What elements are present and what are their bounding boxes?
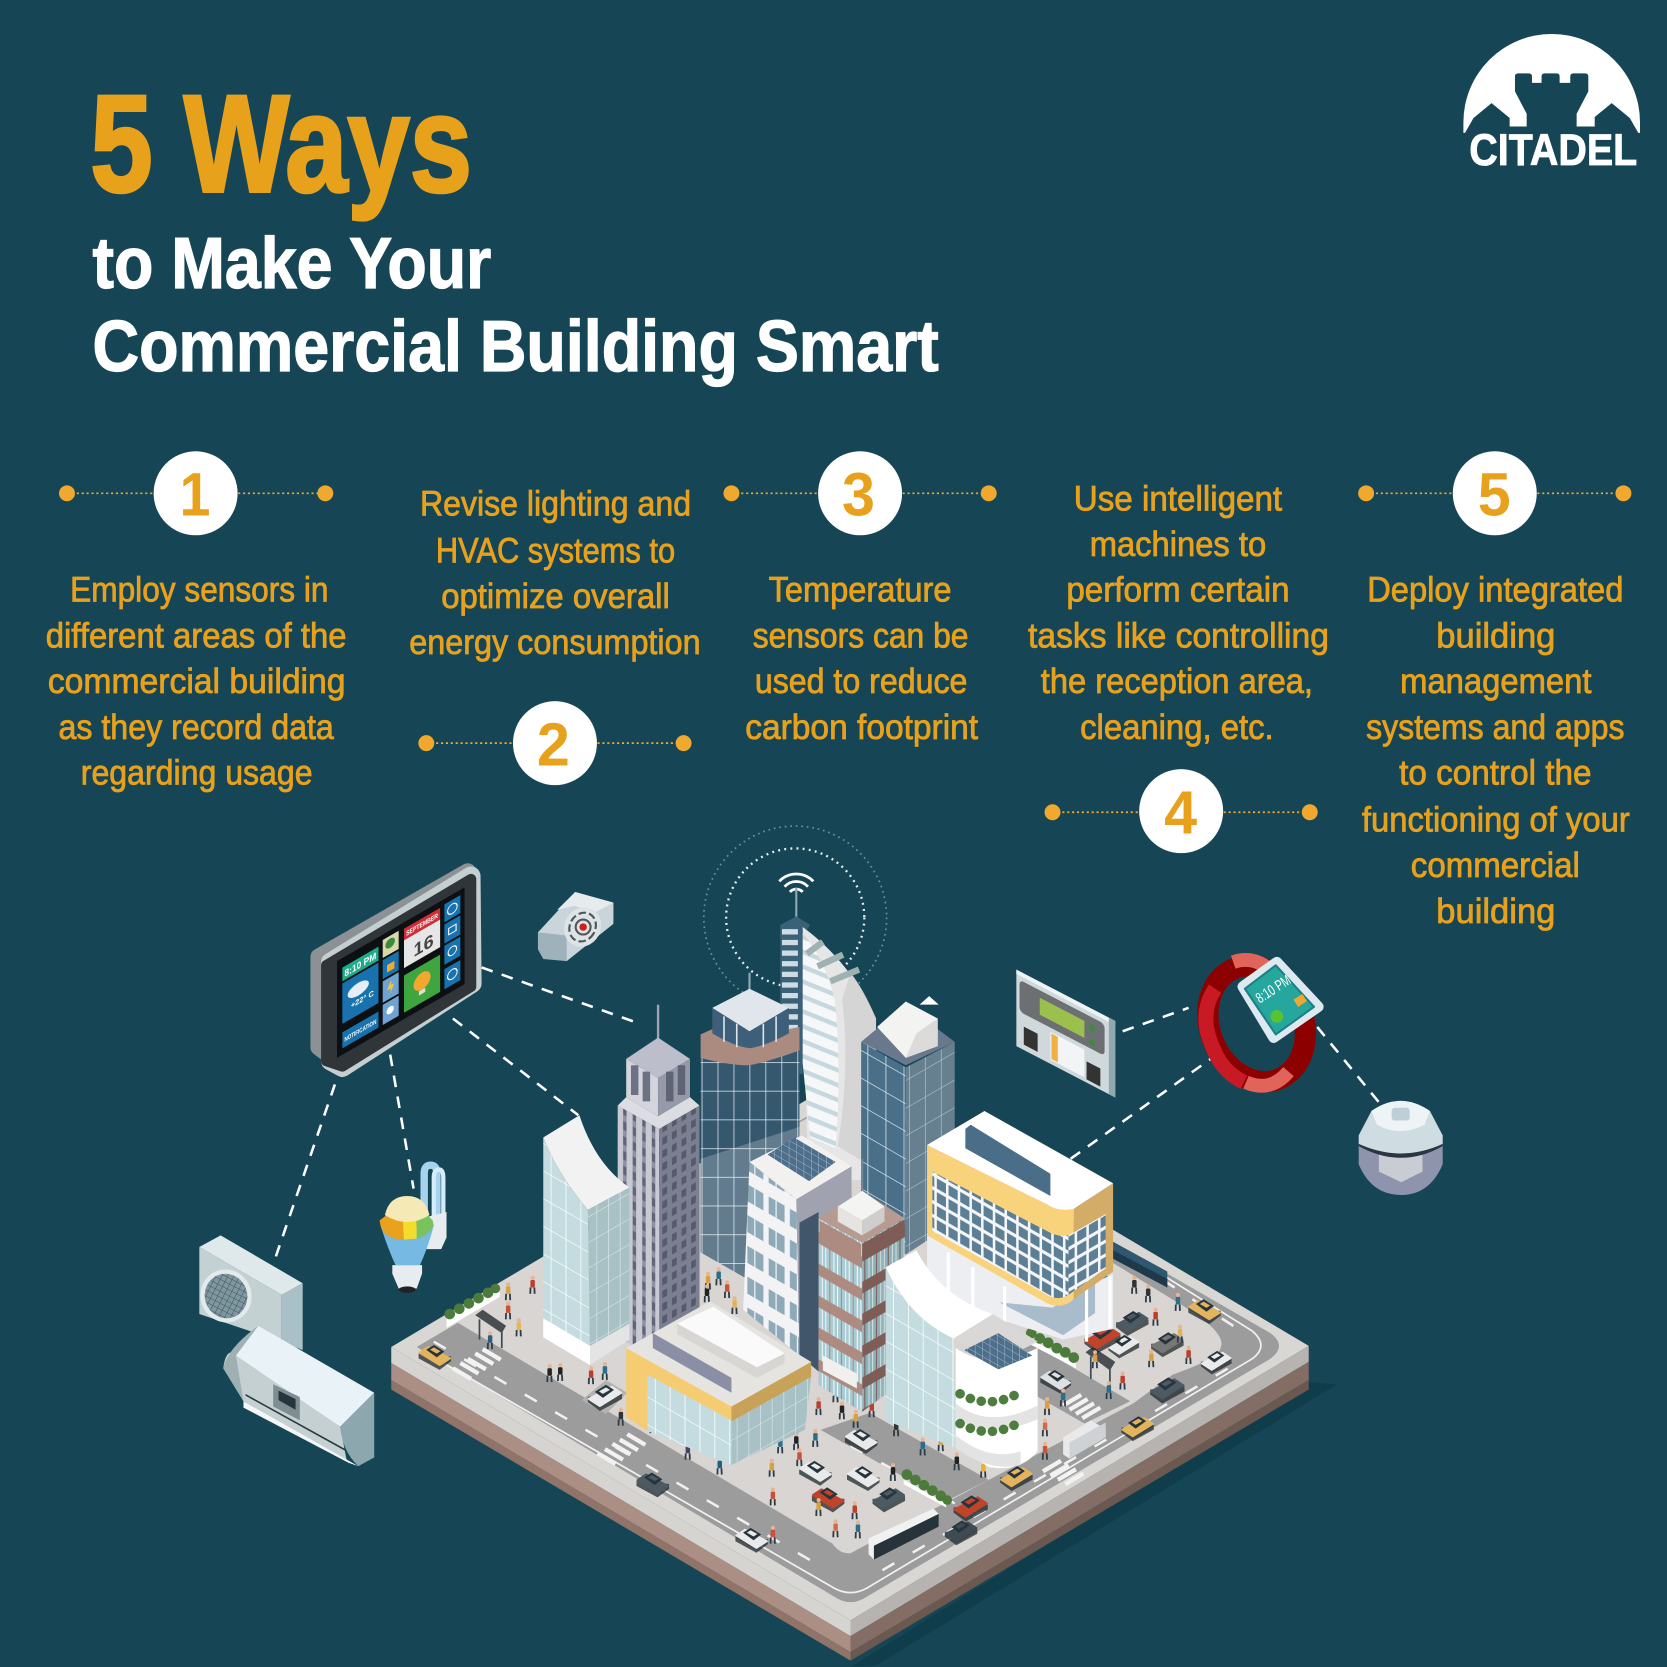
bus shelters xyxy=(475,1310,1115,1386)
number badge 3: 3 xyxy=(842,461,875,530)
platform right side xyxy=(851,1346,1309,1661)
number badge 5 xyxy=(1453,451,1537,535)
building: brown-top glass tower xyxy=(701,973,799,1286)
step 1 text xyxy=(46,571,347,793)
icon: smart control tablet xyxy=(319,872,472,1067)
indoor unit xyxy=(223,1326,374,1466)
vehicles xyxy=(419,1299,1232,1553)
step 5 text: management xyxy=(1400,662,1592,701)
tablet screen: SEPTEMBER xyxy=(406,911,438,938)
step 3 text: Temperature xyxy=(769,571,952,610)
crosswalks xyxy=(453,1349,1100,1484)
icon: smart watch xyxy=(1191,951,1322,1097)
number badge 4 xyxy=(1139,769,1223,853)
building: curved tower xyxy=(780,888,876,1180)
tablet screen: 8:10 PM xyxy=(344,951,376,980)
title line: Commercial Building Smart: Commercial Building Smart xyxy=(92,307,939,387)
building: white round tower xyxy=(886,1250,1038,1468)
step 2 text: HVAC systems to xyxy=(436,531,675,570)
side streets xyxy=(582,1324,1130,1501)
step 1 text: commercial building xyxy=(48,662,346,701)
step 5 text xyxy=(1362,571,1630,931)
step 4 text: tasks like controlling xyxy=(1028,616,1329,655)
connector 1 xyxy=(59,485,333,501)
number badge 2 xyxy=(513,701,597,785)
step 1 text: Employ sensors in xyxy=(70,571,329,610)
road edge lines xyxy=(423,1246,1261,1593)
number badge 1: 1 xyxy=(180,461,211,530)
step 2 text: Revise lighting and xyxy=(420,485,691,524)
outdoor unit xyxy=(194,1235,303,1350)
step 1 text: different areas of the xyxy=(46,616,347,655)
road lane dashes xyxy=(434,1280,1246,1570)
building: yellow office block xyxy=(927,1111,1113,1342)
watch strap xyxy=(1191,951,1322,1097)
number badge 2: 2 xyxy=(537,710,570,779)
building: middle tower with solar roof xyxy=(743,1135,852,1371)
tablet screen: 16 xyxy=(414,930,434,962)
icon: alarm keypad panel xyxy=(1016,970,1115,1098)
step 1 text: regarding usage xyxy=(81,754,313,793)
number badge 3 xyxy=(818,451,902,535)
ring road xyxy=(417,1091,1279,1602)
platform shadow xyxy=(851,1382,1337,1667)
step 3 text: carbon footprint xyxy=(745,708,978,747)
watch body and face xyxy=(1243,962,1318,1038)
number badge 5: 5 xyxy=(1478,461,1511,530)
logo: Citadel xyxy=(1463,34,1640,175)
wifi signal rings xyxy=(704,826,887,1009)
colour LED bulb xyxy=(380,1196,434,1293)
step 4 text xyxy=(1028,479,1329,747)
city platform xyxy=(391,1074,1337,1667)
step 4 text: cleaning, etc. xyxy=(1080,708,1274,747)
logo dome and castle xyxy=(1463,34,1640,133)
pedestrians xyxy=(488,1259,1191,1544)
tablet screen: +22° C xyxy=(351,988,374,1010)
logo wordmark: CITADEL xyxy=(1469,126,1637,175)
step 4 text: perform certain xyxy=(1066,571,1290,610)
building: brown tower xyxy=(819,1159,905,1412)
connector 4 xyxy=(1045,804,1318,820)
city bus xyxy=(869,1509,939,1560)
compact fluorescent bulb xyxy=(421,1165,447,1249)
platform left side xyxy=(391,1347,851,1661)
step 2 text: energy consumption xyxy=(409,623,701,662)
step 3 text: sensors can be xyxy=(753,616,969,655)
step 4 text: the reception area, xyxy=(1041,662,1313,701)
icon: smart light bulbs xyxy=(380,1165,447,1293)
step 5 text: functioning of your xyxy=(1362,800,1630,839)
title xyxy=(90,67,939,387)
step 1 xyxy=(46,451,347,793)
step 2 xyxy=(409,485,701,785)
tablet body xyxy=(319,872,472,1063)
icon: heat sensor xyxy=(538,892,613,961)
step 5 text: Deploy integrated xyxy=(1367,571,1623,610)
title line: to Make Your: to Make Your xyxy=(92,224,491,304)
connector 5 xyxy=(1358,485,1631,501)
step 2 text xyxy=(409,485,701,662)
connector 2 xyxy=(418,735,692,751)
title line: 5 Ways: 5 Ways xyxy=(90,67,472,221)
step 1 text: as they record data xyxy=(58,708,334,747)
step 2 text: optimize overall xyxy=(441,577,670,616)
tablet screen: NOTIFICATION xyxy=(344,1019,376,1044)
dashed connectors xyxy=(273,967,1380,1264)
delivery truck xyxy=(1063,1420,1106,1459)
building: white curved-roof tower xyxy=(543,1115,629,1365)
step 5 text: commercial xyxy=(1411,846,1580,885)
number badge 1 xyxy=(154,451,238,535)
building: dark glass tower xyxy=(861,996,955,1255)
step 3 xyxy=(723,451,997,747)
icon: air conditioner outdoor and indoor units xyxy=(194,1235,374,1466)
step 5 text: to control the xyxy=(1399,754,1592,793)
step 3 text: used to reduce xyxy=(755,662,967,701)
step 5 text: building xyxy=(1436,892,1555,931)
step 5 text: systems and apps xyxy=(1366,708,1624,747)
building: front yellow mall xyxy=(626,1301,811,1465)
building: gray skyscraper xyxy=(618,1005,700,1361)
step 4 text: machines to xyxy=(1090,525,1266,564)
step 4 text: Use intelligent xyxy=(1074,479,1282,518)
sidewalk blocks xyxy=(447,1095,1221,1553)
step 5 xyxy=(1358,451,1631,931)
planters xyxy=(444,1284,1079,1508)
number badge 4: 4 xyxy=(1164,778,1197,847)
connector 3 xyxy=(723,485,997,501)
step 5 text: building xyxy=(1436,616,1555,655)
icon: security camera xyxy=(1359,1101,1443,1195)
step 3 text xyxy=(745,571,978,747)
icon: smart watch: 8:10 PM xyxy=(1253,973,1294,1007)
step 4 xyxy=(1028,479,1329,853)
platform top xyxy=(391,1074,1309,1620)
blue bus xyxy=(1113,1242,1167,1287)
tablet screen xyxy=(337,887,465,1058)
